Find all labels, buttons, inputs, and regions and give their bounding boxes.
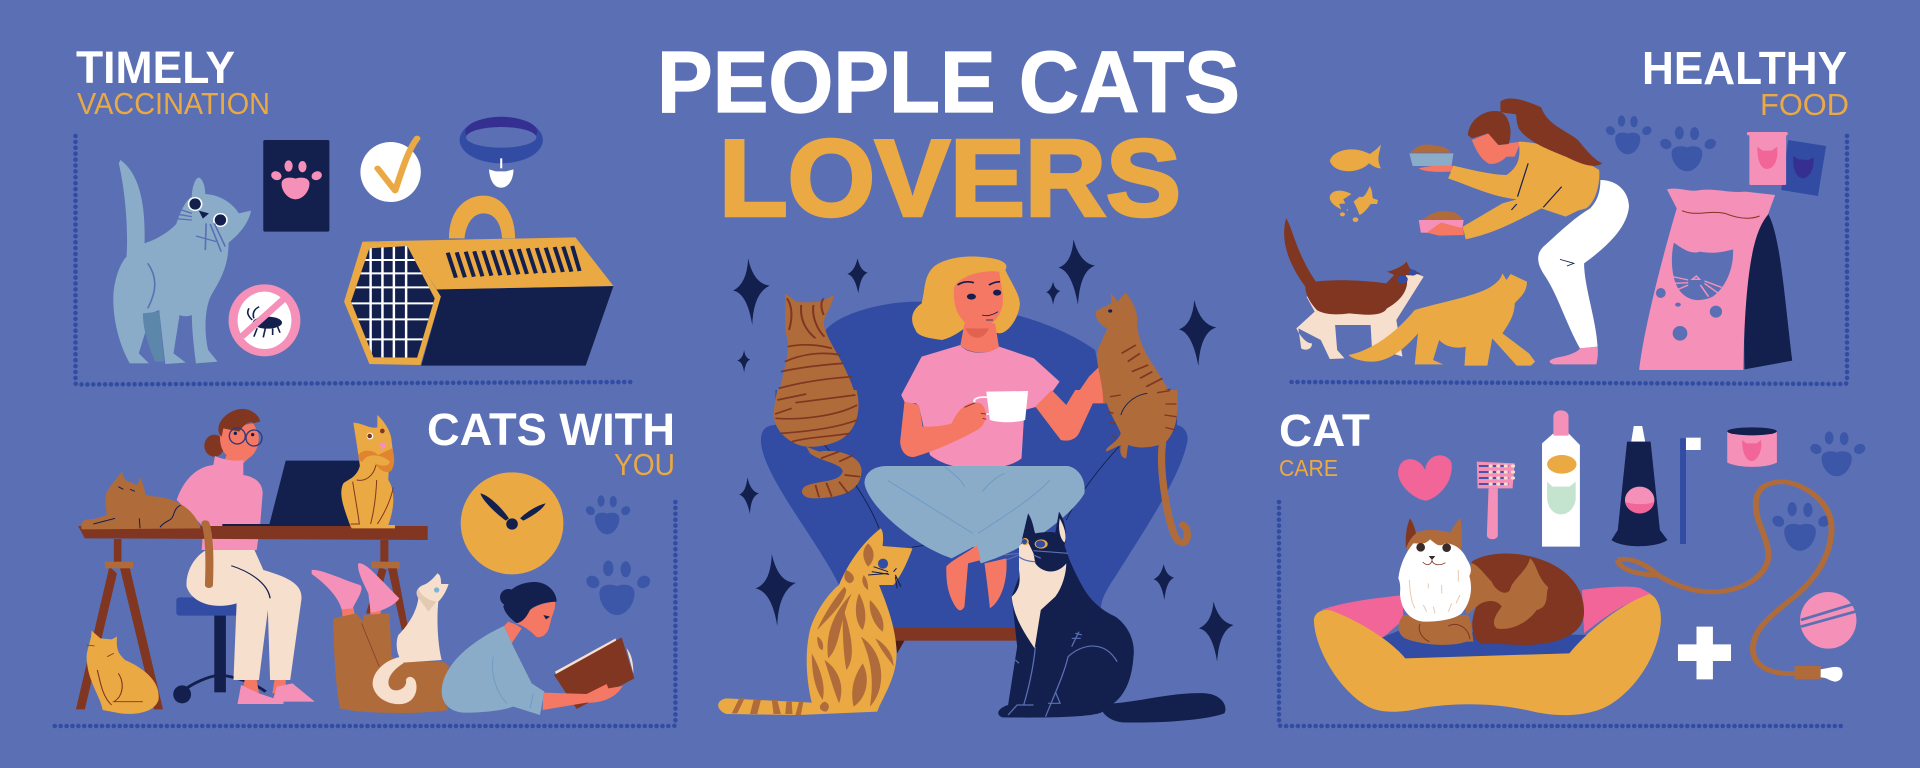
icon: cream cat xyxy=(373,573,449,704)
icon: blue cat xyxy=(113,160,251,364)
woman with cup xyxy=(864,257,1105,610)
icon: brown and cream cat xyxy=(1284,218,1424,359)
panel: central illustration xyxy=(718,239,1233,723)
panel: cats with you xyxy=(50,404,675,726)
icon: heart xyxy=(1398,455,1452,501)
icon: woman with bowls xyxy=(1409,99,1629,364)
icon: cat bed xyxy=(1314,587,1661,715)
icon: food cans xyxy=(1747,132,1826,196)
icon: no fleas sign xyxy=(229,284,300,356)
icon: toothpaste xyxy=(1611,426,1667,546)
heading: healthy food xyxy=(1642,42,1849,122)
icon: sleeping brown cat xyxy=(81,472,201,529)
icon: stool xyxy=(173,597,266,703)
illustration group xyxy=(1314,410,1868,715)
illustration group xyxy=(113,117,613,366)
heading: cat care xyxy=(1279,405,1370,481)
armchair xyxy=(761,302,1188,653)
icon: fluffy cat xyxy=(1398,517,1584,645)
icon: check mark xyxy=(360,138,421,202)
heading: cat care: CARE xyxy=(1279,455,1338,481)
illustration group xyxy=(1284,99,1826,370)
panel: healthy food xyxy=(1284,42,1849,384)
icon: orange cat xyxy=(1349,273,1535,366)
icon: food bag xyxy=(1639,189,1792,370)
heading: cats with you: CATS WITH xyxy=(427,404,675,455)
icon: cat tail xyxy=(205,523,209,585)
icon: bottle xyxy=(1542,410,1580,547)
icon: paws xyxy=(1770,431,1868,551)
icon: leash xyxy=(1618,482,1832,674)
heading: healthy food: HEALTHY xyxy=(1642,42,1847,94)
icon: pet carrier xyxy=(344,196,613,366)
main title xyxy=(657,34,1240,240)
panel: timely vaccination xyxy=(76,42,635,384)
icon: clock xyxy=(461,472,563,574)
heading: timely vaccination xyxy=(76,42,270,121)
icon: woman at laptop upper body xyxy=(177,409,263,550)
illustration group xyxy=(76,409,653,715)
icon: toothbrush xyxy=(1680,438,1701,544)
panel: cat care xyxy=(1279,405,1868,726)
main title: PEOPLE CATS xyxy=(657,34,1240,131)
icon: collar xyxy=(460,117,543,188)
cat: brown on armrest xyxy=(1096,293,1187,543)
heading: cats with you xyxy=(427,404,675,482)
icon: brush xyxy=(1477,462,1515,539)
icon: woman legs xyxy=(186,548,315,704)
icon: food tin xyxy=(1727,427,1777,467)
icon: reading woman xyxy=(312,563,634,715)
icon: fish xyxy=(1330,144,1381,222)
icon: medical cross xyxy=(1678,627,1731,679)
icon: desk legs xyxy=(76,539,408,709)
heading: cat care: CAT xyxy=(1279,405,1370,456)
heading: healthy food: FOOD xyxy=(1760,87,1849,122)
icon: laptop xyxy=(222,461,362,527)
icon: paws xyxy=(584,495,653,615)
heading: cats with you: YOU xyxy=(614,447,675,482)
icon: small gold cat xyxy=(87,631,159,714)
cat: black and white tuxedo xyxy=(998,512,1225,723)
icon: leash clasp xyxy=(1795,666,1843,682)
heading: timely vaccination: VACCINATION xyxy=(77,87,270,121)
icon: ball xyxy=(1800,592,1856,649)
main title: LOVERS xyxy=(719,118,1181,240)
stars xyxy=(733,239,1233,662)
cat: spotted bengal xyxy=(718,528,912,715)
icon: desk top xyxy=(78,526,428,540)
cat: tabby from behind xyxy=(774,293,862,498)
icon: paw poster xyxy=(263,140,329,232)
heading: timely vaccination: TIMELY xyxy=(76,42,235,93)
icon: paws xyxy=(1604,115,1718,171)
icon: gold cat on desk xyxy=(341,415,395,528)
